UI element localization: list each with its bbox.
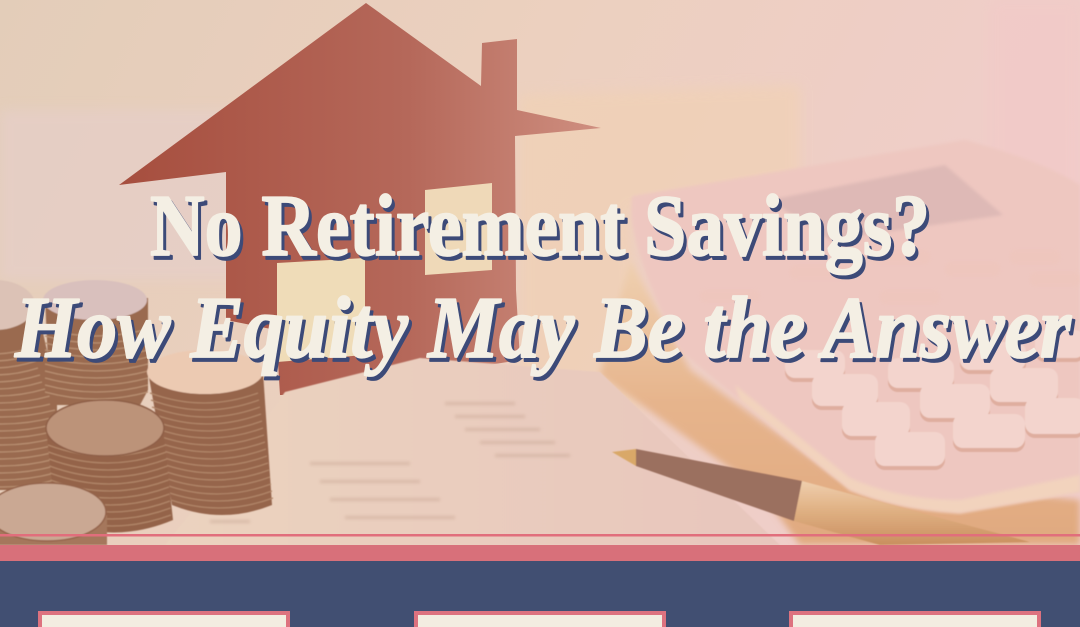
calculator keys — [785, 330, 1080, 470]
navy section — [0, 561, 1080, 627]
title line 1: No Retirement Savings? — [153, 182, 933, 279]
title line 1: No Retirement Savings? — [150, 178, 930, 275]
stack right — [147, 350, 273, 515]
thin accent line — [0, 534, 1080, 536]
stack far left — [0, 280, 57, 490]
financial paper — [165, 358, 780, 545]
card 1 top — [38, 611, 290, 627]
pink band — [0, 545, 1080, 561]
stack front — [0, 483, 107, 545]
coin stacks — [0, 280, 273, 545]
card 3 top — [789, 611, 1041, 627]
stack back — [43, 280, 148, 405]
stack center — [46, 400, 173, 532]
pen — [612, 449, 1030, 545]
card 2 top — [414, 611, 666, 627]
house cutout — [119, 3, 601, 395]
calculator — [631, 140, 1080, 513]
